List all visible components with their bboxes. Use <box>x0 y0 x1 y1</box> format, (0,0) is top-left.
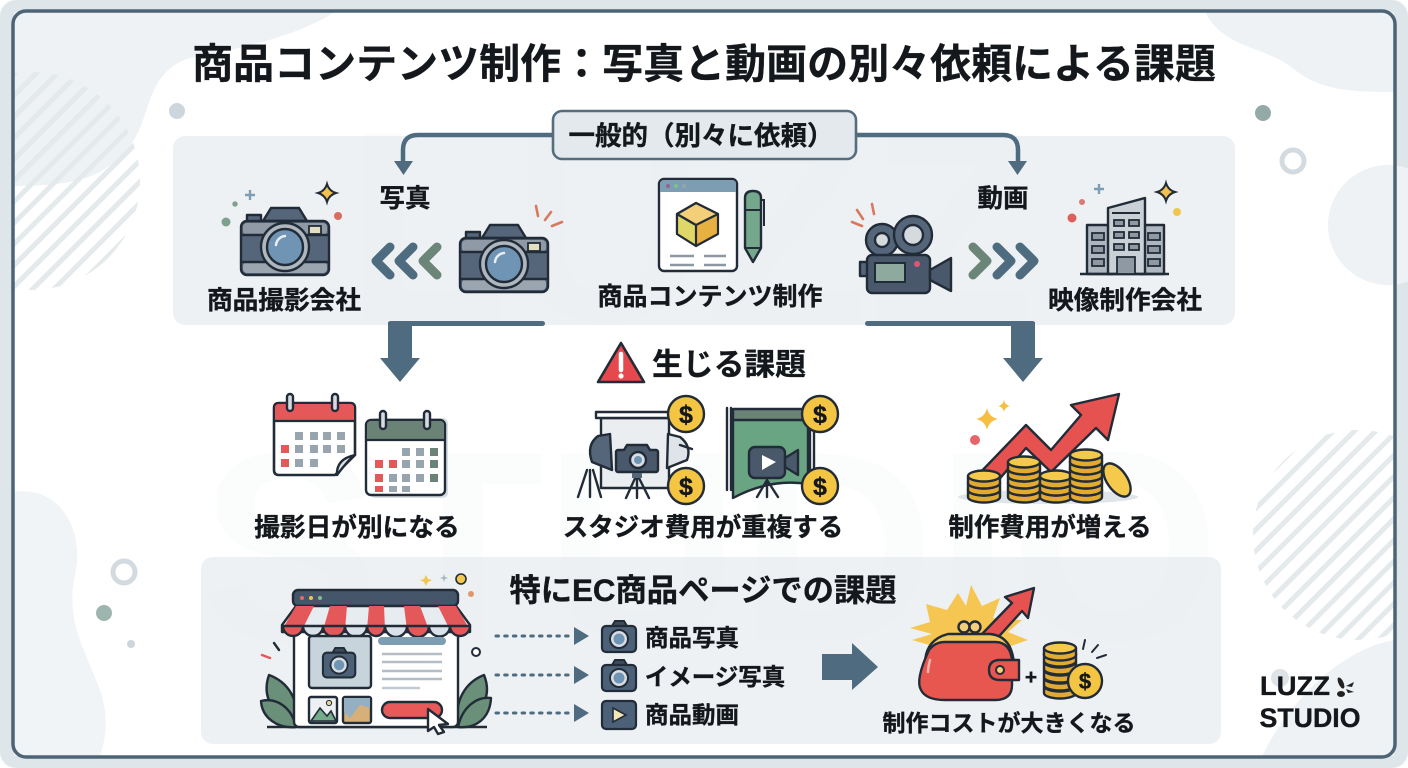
arrow: dotted to product photo <box>496 627 589 645</box>
icon: product video <box>602 701 636 729</box>
icon: rising cost chart with coins <box>958 394 1138 504</box>
icon: wallet with rising cost <box>910 585 1034 700</box>
icon: video studio with costs: $ <box>813 401 827 429</box>
arrow: dotted to product video <box>496 704 589 722</box>
arrow: dotted to image photo <box>496 666 589 684</box>
arrow: left thick down <box>380 321 545 382</box>
icon: product photo <box>602 621 636 652</box>
icon: online store <box>261 574 491 734</box>
icon: warning triangle <box>598 343 644 382</box>
icon: camera <box>460 206 562 292</box>
icon: coins and dollar: $ <box>1079 669 1091 694</box>
icon: photo studio with costs <box>578 396 704 504</box>
icon: product page with pen <box>659 179 764 271</box>
arrow: chevrons right <box>973 247 1034 275</box>
logo <box>1260 671 1360 733</box>
page background and frame: STUDIO <box>200 397 1220 698</box>
icon: video company building <box>1068 183 1181 274</box>
label: image photo: イメージ写真 <box>645 664 785 690</box>
icon: logo mark <box>1336 677 1354 697</box>
arrow: right thick down <box>865 321 1043 382</box>
label: general separate request: 一般的（別々に依頼） <box>568 121 834 151</box>
label: product video: 商品動画 <box>645 702 739 728</box>
icon: two calendars <box>274 394 448 498</box>
icon: coins and dollar <box>1044 640 1106 698</box>
label: product content production: 商品コンテンツ制作 <box>597 283 823 311</box>
icon: image photo <box>602 660 636 691</box>
label: video company: 映像制作会社 <box>1048 286 1202 315</box>
connector arrow to video <box>857 135 1027 175</box>
icon: video camera <box>852 204 951 293</box>
label: production cost grows: 制作コストが大きくなる <box>882 710 1136 736</box>
panel: EC product page issues <box>201 557 1221 744</box>
icon: photo studio with costs: $ <box>679 401 693 429</box>
label: photo company: 商品撮影会社 <box>207 286 361 315</box>
label: photo: 写真 <box>379 185 431 213</box>
icon: video studio with costs: $ <box>813 473 827 501</box>
panel: general process <box>173 111 1235 325</box>
label: video: 動画 <box>977 185 1029 213</box>
connector arrow to photo <box>394 135 552 175</box>
icon: photo studio with costs: $ <box>679 473 693 501</box>
logo: LUZZ <box>1260 671 1330 701</box>
icon: video studio with costs <box>727 396 838 504</box>
label: production cost increases: 制作費用が増える <box>948 513 1152 542</box>
page background and frame: LUZZ <box>345 77 1035 378</box>
heading: issues that arise: 生じる課題 <box>652 347 806 382</box>
heading: issues that arise <box>598 343 806 382</box>
label: plus: + <box>1025 666 1037 689</box>
icon: photo company camera <box>222 184 342 275</box>
label: general separate request <box>553 111 856 159</box>
arrow: block right <box>822 643 878 690</box>
logo: STUDIO <box>1260 703 1360 733</box>
title: 商品コンテンツ制作：写真と動画の別々依頼による課題 <box>192 41 1216 87</box>
arrow: chevrons left <box>376 247 437 275</box>
heading: EC product page issues: 特にEC商品ページでの課題 <box>509 573 897 608</box>
label: product photo: 商品写真 <box>645 625 739 651</box>
label: shooting dates differ: 撮影日が別になる <box>254 512 460 542</box>
label: studio cost duplicated: スタジオ費用が重複する <box>563 513 843 542</box>
